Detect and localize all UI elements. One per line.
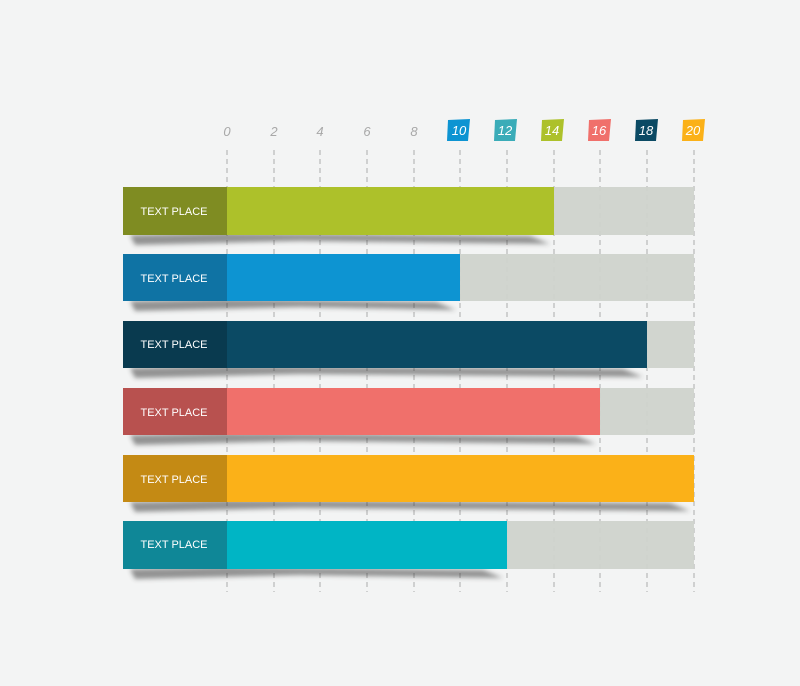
bar row 2: TEXT PLACE: [140, 273, 208, 285]
bar row 1: [123, 187, 694, 245]
axis labels: 16: [592, 123, 607, 138]
bar row 4: [123, 388, 694, 445]
axis labels: 0: [223, 124, 231, 139]
bar row 6: TEXT PLACE: [140, 539, 208, 551]
bar row 5: TEXT PLACE: [140, 474, 208, 486]
axis labels: 18: [639, 123, 654, 138]
bar row 6: [123, 521, 694, 579]
axis labels: 10: [452, 123, 467, 138]
bar row 2: [123, 254, 694, 311]
bar row 5: [123, 455, 694, 512]
bar row 3: TEXT PLACE: [140, 339, 208, 351]
bar row 4: TEXT PLACE: [140, 407, 208, 419]
bar row 1: TEXT PLACE: [140, 206, 208, 218]
axis labels: 14: [545, 123, 559, 138]
axis labels: 8: [410, 124, 418, 139]
axis labels: 4: [316, 124, 324, 139]
axis labels: [223, 119, 705, 141]
axis labels: 6: [363, 124, 371, 139]
axis labels: 20: [685, 123, 701, 138]
axis labels: 2: [269, 124, 278, 139]
axis labels: 12: [498, 123, 513, 138]
bar row 3: [123, 321, 694, 378]
